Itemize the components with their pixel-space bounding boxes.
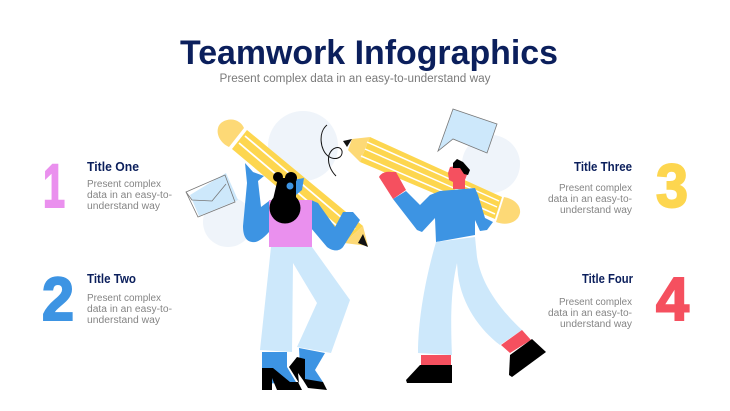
text block: title four: Present complex — [559, 297, 632, 308]
icon: squiggle line — [321, 125, 342, 176]
woman face — [292, 178, 304, 195]
woman arm right and hand — [311, 200, 360, 250]
man neck and face — [448, 165, 468, 189]
woman arm raised — [243, 163, 269, 242]
heading: title four: Title Four — [582, 272, 633, 286]
background blob: left lower — [203, 197, 253, 247]
heading: title one: Title One — [87, 160, 139, 174]
text block: title three: data in an easy-to- — [548, 194, 632, 205]
subtitle: Present complex data in an easy-to-understand way — [220, 73, 491, 85]
man hand — [379, 172, 406, 199]
text block: title one: Present complex — [87, 179, 161, 190]
man shoes — [406, 339, 546, 383]
item 1: title one — [43, 152, 172, 220]
number 2: 2 — [42, 265, 74, 333]
number 3: 3 — [656, 152, 688, 220]
heading: title three: Title Three — [574, 160, 632, 174]
text block: title three: understand way — [560, 205, 632, 216]
item 4: title four — [548, 265, 689, 333]
item 3: title three — [548, 152, 688, 220]
number 4: 4 — [656, 265, 689, 333]
text block: title four: data in an easy-to- — [548, 308, 632, 319]
man trousers — [418, 237, 522, 355]
background blob: left top — [268, 111, 338, 181]
icon: speech bubble — [438, 109, 497, 153]
number 1: 1 — [43, 152, 65, 220]
woman hair — [270, 172, 300, 224]
woman shoes — [262, 348, 327, 390]
man socks — [421, 330, 531, 365]
heading: title two: Title Two — [87, 272, 136, 286]
woman pencil — [218, 120, 368, 247]
illustration: woman with pencil — [218, 120, 368, 390]
background blob: right — [462, 135, 520, 193]
text block: title one: understand way — [87, 201, 160, 212]
man torso and arms — [393, 188, 493, 242]
item 2: title two — [42, 265, 172, 333]
text block: title three: Present complex — [559, 183, 632, 194]
text block: title one: data in an easy-to- — [87, 190, 172, 201]
woman ear — [286, 182, 294, 190]
text block: title two: data in an easy-to- — [87, 304, 172, 315]
text block: title four: understand way — [560, 319, 632, 330]
woman torso — [269, 200, 312, 247]
man pencil — [343, 137, 520, 224]
man hair — [453, 159, 470, 175]
icon: envelope — [186, 173, 238, 217]
text block: title two: Present complex — [87, 293, 161, 304]
woman trousers — [260, 247, 350, 353]
text block: title two: understand way — [87, 315, 160, 326]
title: Teamwork Infographics — [180, 34, 558, 72]
illustration: man with pencil — [343, 137, 546, 383]
